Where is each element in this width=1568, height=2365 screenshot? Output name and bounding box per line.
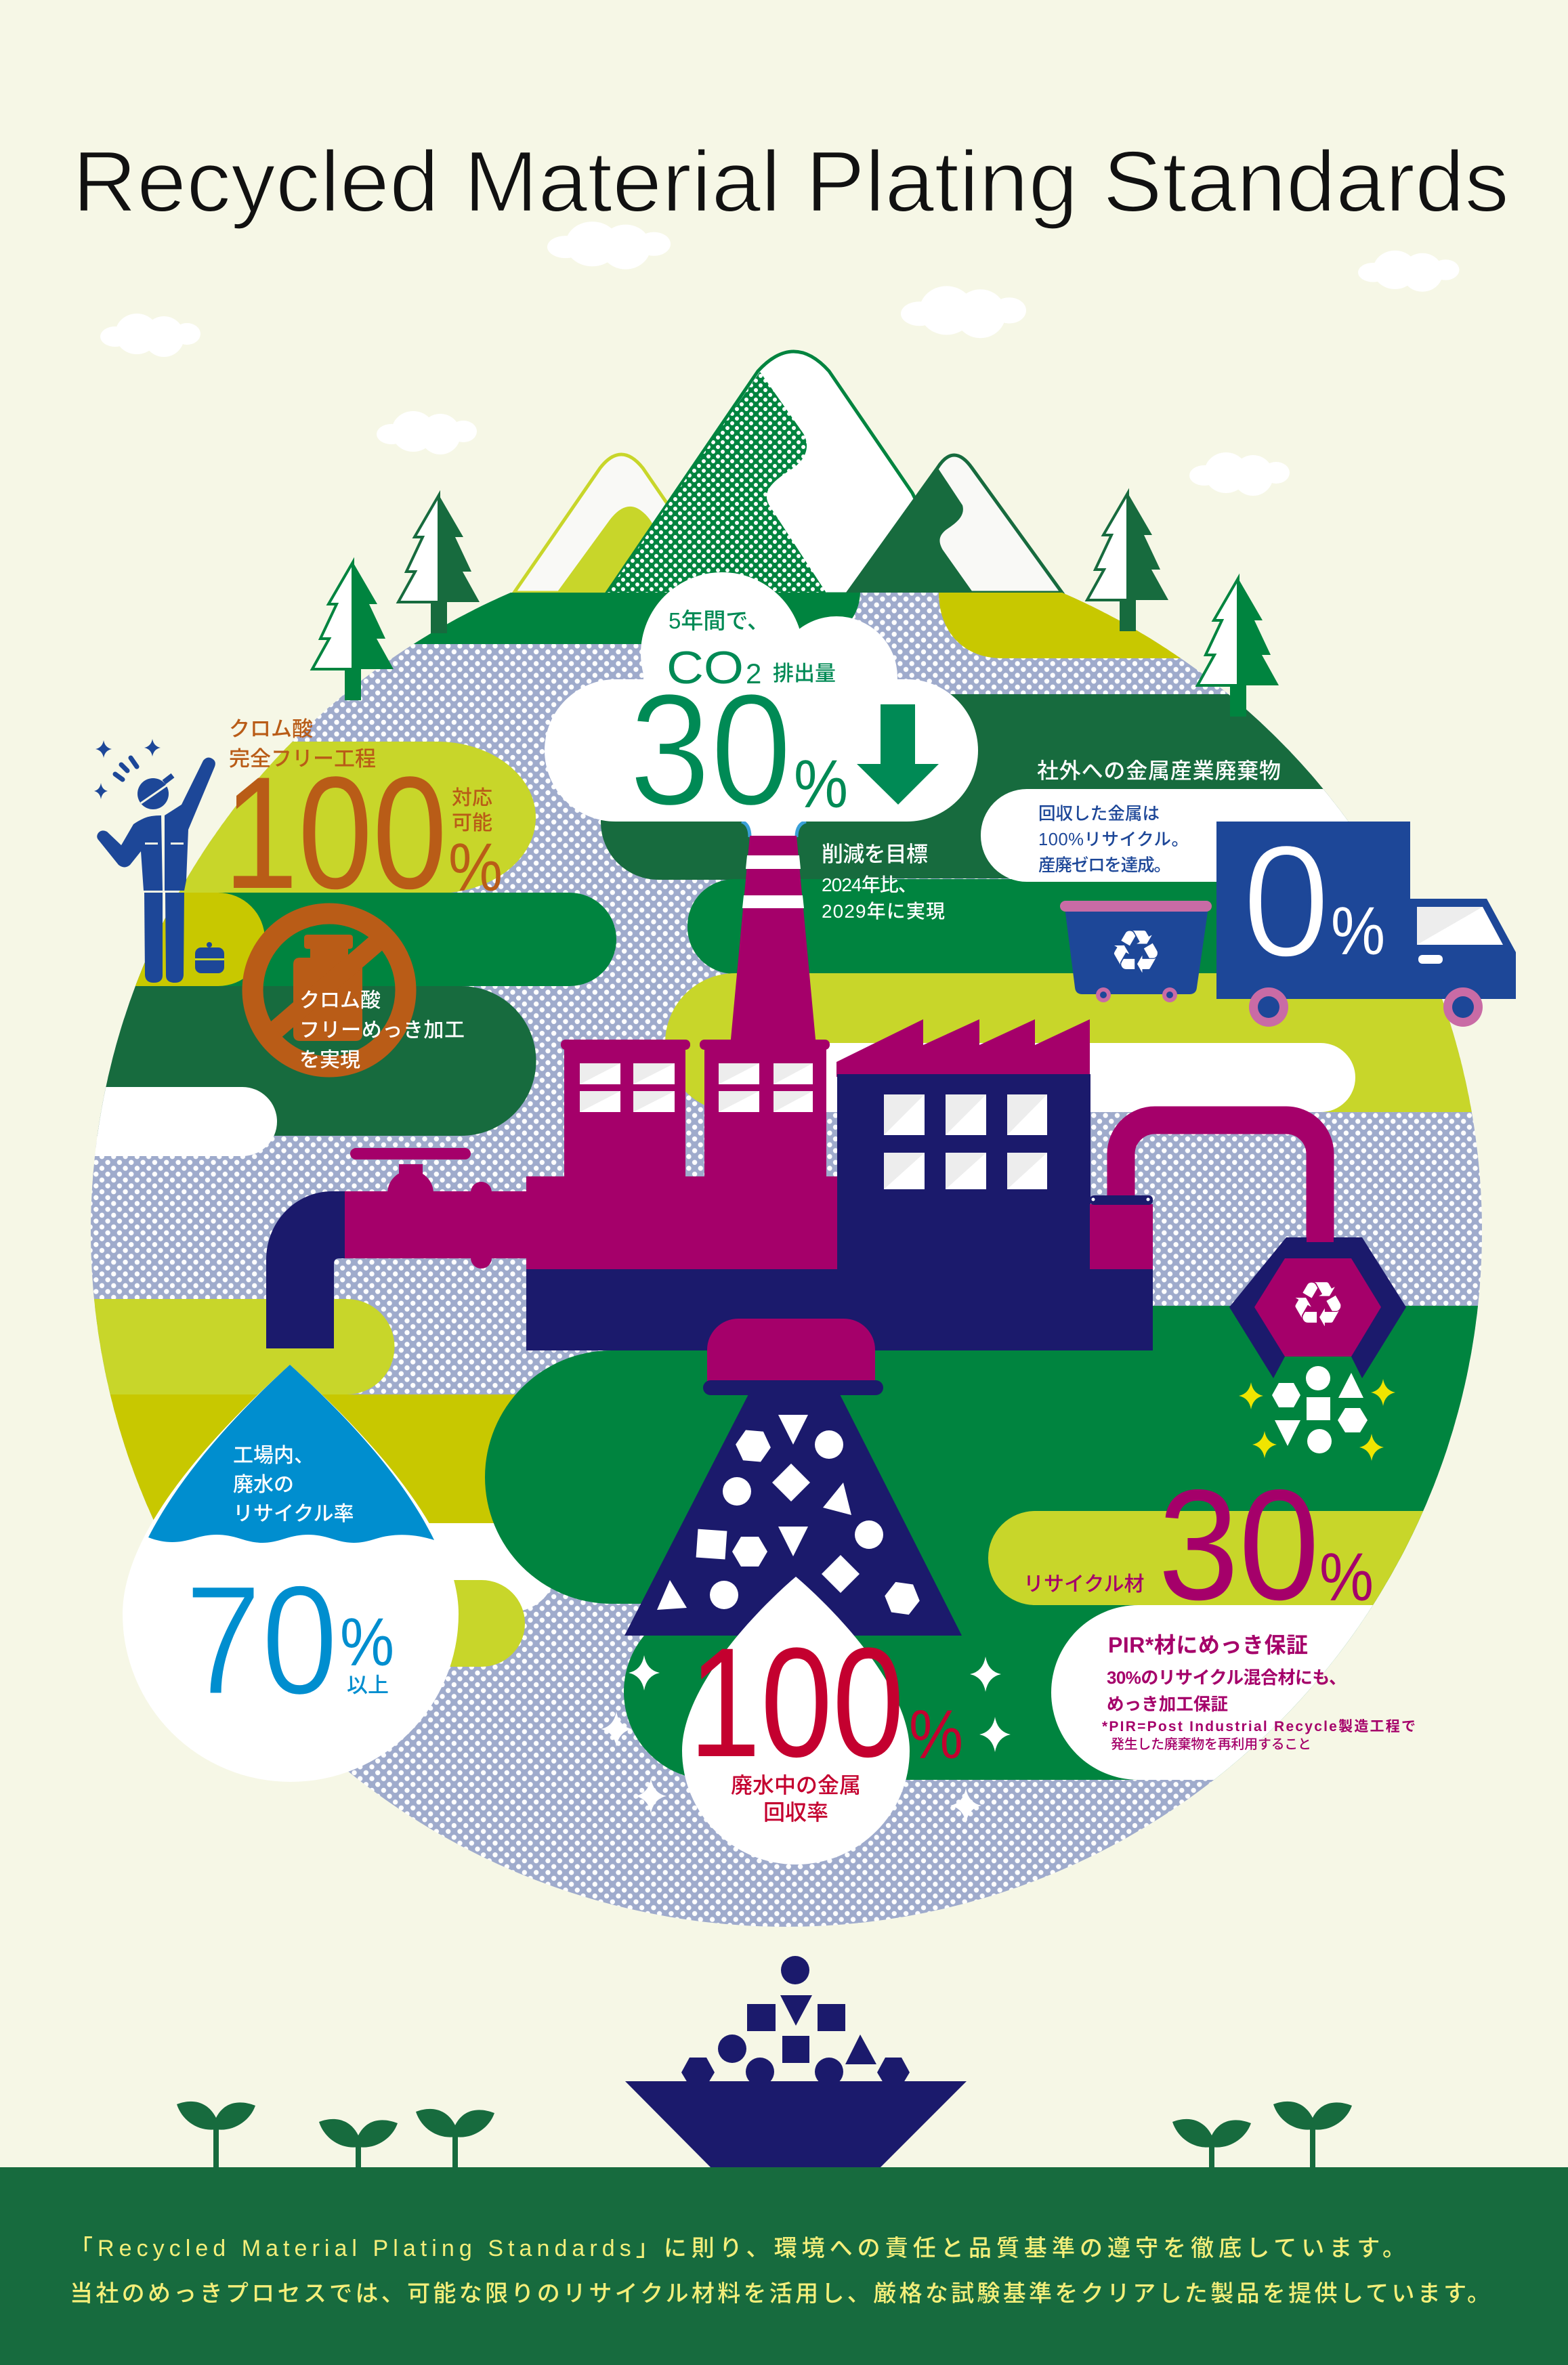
icon: truck 0%: % (1331, 893, 1385, 969)
text: chromium free 100%: 100 (224, 744, 447, 922)
text: reduction target (822, 842, 945, 922)
icon: no chromium: を実現 (299, 1049, 360, 1071)
text: industrial waste (1037, 759, 1281, 875)
recycling hexagon (1229, 1233, 1406, 1378)
arrow: down (857, 704, 939, 805)
flask lid (707, 1319, 875, 1382)
text: PIR guarantee: *PIR=Post Industrial Recycle製造工程で (1102, 1719, 1416, 1734)
callout: water recycling drop 70% (123, 1365, 459, 1782)
callout: CO2 cloud: % (794, 746, 848, 822)
recovered material shapes (1272, 1366, 1368, 1453)
flask (624, 1319, 962, 1636)
text: chromium free 100%: 対応 (452, 787, 492, 809)
navy base (526, 1269, 1153, 1350)
mountain: main peak (606, 351, 962, 594)
text: industrial waste: 100%リサイクル。 (1038, 830, 1189, 849)
icon: recycling bin: ♻ (1109, 917, 1162, 987)
text: recycled 30%: 30 (1158, 1457, 1319, 1633)
callout: CO2 cloud: 30 (629, 660, 792, 838)
icon: no chromium: フリーめっき加工 (299, 1019, 465, 1042)
callout: metal recovery drop 100%: % (909, 1696, 963, 1773)
icon: no chromium (253, 914, 465, 1071)
icon: bag (195, 942, 224, 973)
ground (0, 2167, 1568, 2365)
text: recycled 30% (1023, 1457, 1374, 1633)
text: industrial waste: 社外への金属産業廃棄物 (1037, 759, 1281, 783)
callout: water recycling drop 70%: 工場内、 (233, 1445, 314, 1467)
mountain: small left (514, 454, 698, 593)
icon: truck 0% (1216, 812, 1516, 1027)
icon: recycling bin (1060, 901, 1212, 1002)
footer text: 「Recycled Material Plating Standards」に則り、環境への責任と品質基準の遵守を徹底しています。 (70, 2236, 1405, 2261)
windows of magenta buildings (580, 1063, 813, 1112)
footer text: 当社のめっきプロセスでは、可能な限りのリサイクル材料を活用し、厳格な試験基準をクリアした製品を提供しています。 (70, 2281, 1490, 2307)
mountain: right (848, 455, 1062, 594)
navy building with sawtooth roof (836, 1019, 1090, 1271)
callout: CO2 cloud: 排出量 (773, 662, 836, 685)
text: PIR guarantee: めっき加工保証 (1107, 1695, 1228, 1714)
text: PIR guarantee (1102, 1633, 1416, 1752)
title: Recycled Material Plating Standards (72, 133, 1509, 230)
callout: metal recovery drop 100%: 廃水中の金属 (731, 1773, 861, 1797)
callout: water recycling drop 70%: 70 (185, 1553, 338, 1727)
flask shapes (657, 1415, 922, 1616)
callout: CO2 cloud: 5年間で、 (669, 608, 769, 633)
seedling 2 (319, 2119, 398, 2167)
text: industrial waste: 産廃ゼロを達成。 (1038, 856, 1171, 875)
magenta buildings (526, 1040, 837, 1269)
globe of landscape bands (68, 582, 1524, 1937)
callout: metal recovery drop 100% (682, 1577, 963, 1865)
callout: metal recovery drop 100%: 100 (689, 1615, 904, 1789)
seedling 1 (177, 2102, 255, 2167)
tree 4 (1198, 578, 1279, 717)
text: PIR guarantee: PIR*材にめっき保証 (1108, 1633, 1308, 1657)
callout: water recycling drop 70%: 以上 (347, 1674, 389, 1697)
text: reduction target: 2024年比、 (822, 874, 917, 895)
text: chromium free 100%: 可能 (452, 812, 492, 834)
text: reduction target: 削減を目標 (822, 842, 928, 866)
right pipe (1090, 1120, 1320, 1269)
text: recycled 30%: % (1319, 1539, 1374, 1615)
icon: no chromium: クロム酸 (299, 989, 381, 1012)
seedling 3 (416, 2109, 494, 2167)
icon: recycle: ♻ (1290, 1269, 1346, 1341)
icon: truck 0%: 0 (1242, 812, 1330, 991)
chimney (730, 820, 816, 1046)
trees (312, 493, 1279, 717)
tree 1 (312, 562, 394, 700)
callout: water recycling drop 70%: 廃水の (233, 1474, 294, 1496)
callout: water recycling drop 70%: リサイクル率 (233, 1503, 354, 1525)
footer text (70, 2236, 1490, 2307)
callout: CO2 cloud: CO (666, 642, 744, 694)
pipe and faucet (345, 1148, 548, 1269)
text: recycled 30%: リサイクル材 (1023, 1573, 1145, 1596)
callout: metal recovery drop 100%: 回収率 (763, 1800, 828, 1825)
callout: CO2 cloud (545, 572, 978, 838)
text: industrial waste: 回収した金属は (1038, 805, 1160, 824)
seedling 4 (1172, 2119, 1251, 2167)
sky clouds (100, 221, 1459, 496)
text: chromium free 100%: クロム酸 (229, 717, 313, 741)
yellow sparkles (1239, 1379, 1395, 1461)
seedlings (177, 2102, 1352, 2167)
text: PIR guarantee: 30%のリサイクル混合材にも、 (1107, 1667, 1347, 1688)
icon: worker (94, 739, 224, 983)
faucet spout (266, 1191, 345, 1348)
tree 2 (398, 495, 480, 633)
text: PIR guarantee: 発生した廃棄物を再利用すること (1111, 1737, 1311, 1752)
tree 3 (1087, 493, 1168, 631)
white sparkles (601, 1655, 1011, 1823)
text: reduction target: 2029年に実現 (822, 901, 945, 922)
callout: CO2 cloud: 2 (746, 658, 761, 689)
text: chromium free 100%: % (448, 830, 503, 905)
seedling 5 (1273, 2102, 1352, 2167)
factory (266, 820, 1320, 1350)
text: chromium free 100%: 完全フリー工程 (229, 747, 376, 771)
icon: bowl of recycled shapes (625, 1956, 967, 2167)
callout: water recycling drop 70%: % (340, 1604, 394, 1680)
mountains (514, 351, 1062, 594)
